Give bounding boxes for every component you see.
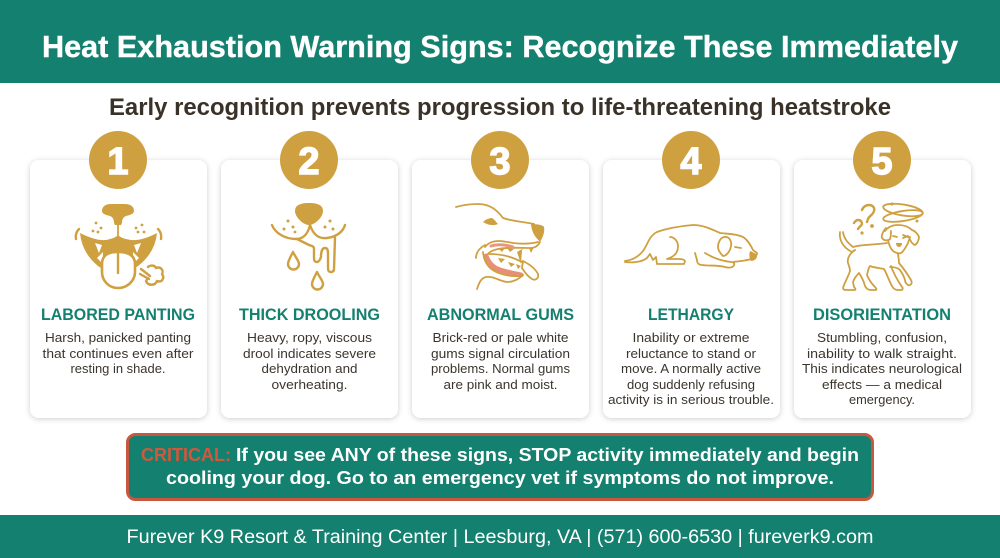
- description: move. A normally active: [621, 361, 761, 376]
- description: effects — a medical: [822, 377, 942, 392]
- icon: lying dog: [625, 225, 757, 268]
- description: inability to walk straight.: [807, 346, 957, 361]
- number badge 2: [280, 131, 338, 189]
- description: problems. Normal gums: [431, 361, 570, 376]
- icon: panting mouth: [76, 204, 163, 288]
- panel: labored panting: [30, 131, 207, 418]
- icon: drooling muzzle: [272, 203, 345, 290]
- heading: LETHARGY: [648, 305, 735, 324]
- description: [243, 330, 376, 392]
- description: [42, 330, 194, 376]
- callout: critical warning: cooling your dog. Go to an emergency vet if symptoms do not improve.: [166, 467, 834, 488]
- description: dog suddenly refusing: [627, 377, 755, 392]
- number badge 1: [89, 131, 147, 189]
- description: drool indicates severe: [243, 346, 376, 361]
- description: activity is in serious trouble.: [608, 392, 774, 407]
- description: [608, 330, 774, 407]
- number badge 5: [853, 131, 911, 189]
- description: Brick-red or pale white: [432, 330, 568, 345]
- number badge 5: 5: [871, 141, 893, 183]
- number badge 1: 1: [107, 141, 129, 183]
- description: Heavy, ropy, viscous: [247, 330, 372, 345]
- description: Inability or extreme: [632, 330, 750, 345]
- heading: ABNORMAL GUMS: [427, 305, 574, 324]
- callout: critical warning: [128, 434, 872, 500]
- description: This indicates neurological: [802, 361, 962, 376]
- description: Harsh, panicked panting: [45, 330, 191, 345]
- description: that continues even after: [42, 346, 194, 361]
- heading: THICK DROOLING: [239, 305, 380, 324]
- description: Stumbling, confusion,: [817, 330, 947, 345]
- title: Heat Exhaustion Warning Signs: Recognize These Immediately: [42, 29, 959, 64]
- description: [802, 330, 962, 407]
- panel: thick drooling: [221, 131, 398, 418]
- footer banner: [0, 515, 1000, 558]
- number badge 3: 3: [489, 141, 511, 183]
- icon: dog head with gums: [456, 204, 544, 289]
- description: reluctance to stand or: [626, 346, 757, 361]
- description: dehydration and: [262, 361, 358, 376]
- subtitle: Early recognition prevents progression to life-threatening heatstroke: [109, 94, 891, 121]
- callout: critical warning: If you see ANY of these signs, STOP activity immediately and begin: [236, 444, 859, 465]
- panel: lethargy: [603, 131, 780, 418]
- panel: disorientation: [794, 131, 971, 418]
- description: [431, 330, 570, 392]
- description: gums signal circulation: [431, 346, 570, 361]
- number badge 2: 2: [298, 141, 320, 183]
- description: are pink and moist.: [444, 377, 558, 392]
- description: overheating.: [272, 377, 348, 392]
- callout: critical warning: CRITICAL:: [141, 444, 231, 465]
- icon: dizzy dog: [840, 201, 924, 290]
- number badge 4: [662, 131, 720, 189]
- heading: DISORIENTATION: [813, 305, 951, 324]
- panel: abnormal gums: [412, 131, 589, 418]
- number badge 4: 4: [680, 141, 702, 183]
- header banner: [0, 0, 1000, 83]
- description: emergency.: [849, 392, 915, 407]
- heading: LABORED PANTING: [41, 305, 195, 324]
- description: resting in shade.: [70, 361, 166, 376]
- footer banner: Furever K9 Resort & Training Center | Leesburg, VA | (571) 600-6530 | fureverk9.com: [126, 527, 874, 548]
- number badge 3: [471, 131, 529, 189]
